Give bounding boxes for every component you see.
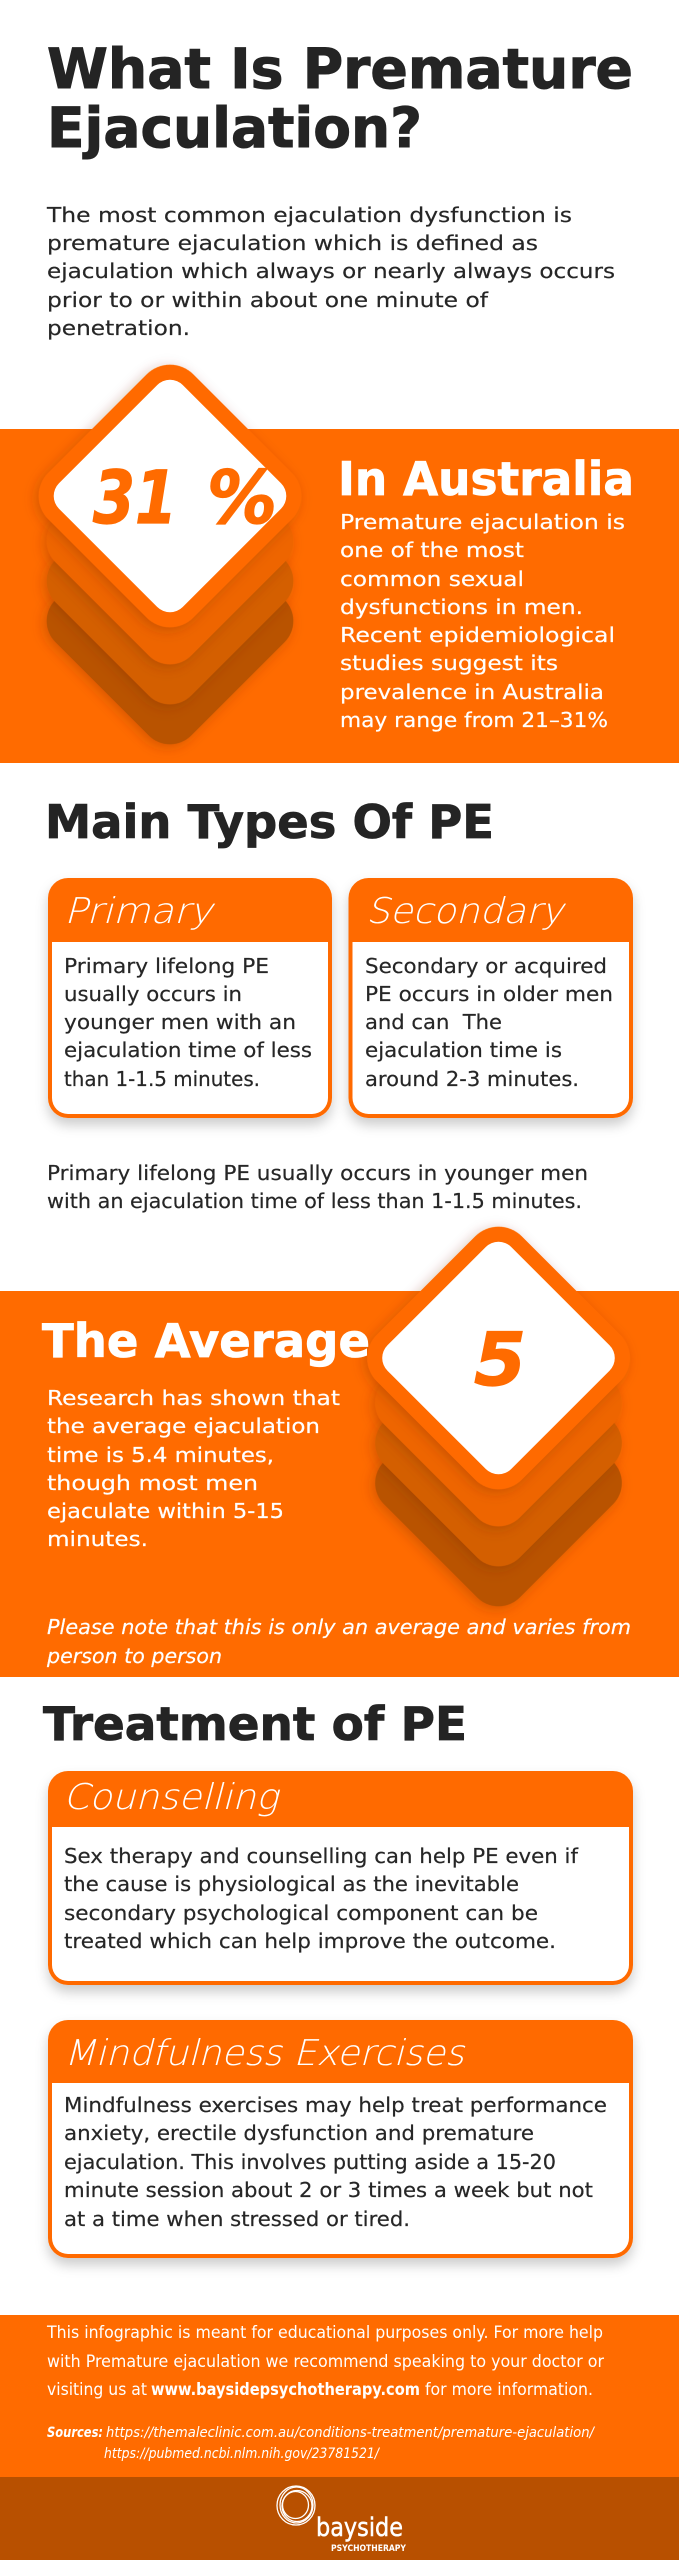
- card text: secondary: and can The: [365, 1010, 502, 1034]
- card text: secondary: Secondary or acquired: [365, 954, 607, 978]
- card text: secondary: [365, 954, 613, 1091]
- card title: mindfulness: Mindfulness Exercises: [64, 2033, 466, 2074]
- text: sources: https://pubmed.ncbi.nlm.nih.gov/23781521/: [104, 2446, 380, 2462]
- text: australia paragraph: prevalence in Australia: [340, 680, 604, 704]
- text: types summary: [47, 1161, 588, 1213]
- card text: secondary: ejaculation time is: [365, 1038, 562, 1062]
- intro paragraph: The most common ejaculation dysfunction is: [46, 203, 572, 227]
- card text: primary: younger men with an: [64, 1010, 296, 1034]
- band background: [0, 1291, 679, 1677]
- text: average note: person to person: [46, 1644, 222, 1668]
- text: types summary: with an ejaculation time of less than 1-1.5 minutes.: [47, 1189, 582, 1213]
- text: average paragraph: though most men: [47, 1471, 258, 1495]
- title: [47, 37, 633, 160]
- logo wordmark: bayside: [316, 2513, 403, 2543]
- card text: primary: usually occurs in: [64, 982, 242, 1006]
- card text: mindfulness: at a time when stressed or tired.: [64, 2207, 410, 2231]
- intro paragraph: [46, 203, 615, 340]
- panel: logo bar: [0, 2477, 679, 2560]
- panel: mindfulness card: [48, 2020, 633, 2258]
- card text: mindfulness: ejaculation. This involves putting aside a 15-20: [64, 2150, 556, 2174]
- text: australia paragraph: one of the most: [340, 538, 524, 562]
- panel: the average: [0, 1213, 679, 1677]
- text: average paragraph: minutes.: [47, 1527, 148, 1551]
- card text: primary: [64, 954, 312, 1091]
- text: australia paragraph: [340, 510, 625, 732]
- text: disclaimer: visiting us at: [47, 2380, 148, 2399]
- icon: stacked diamond with 31 %: [25, 351, 315, 757]
- card text: primary: Primary lifelong PE: [64, 954, 269, 978]
- card title: counselling: Counselling: [63, 1777, 281, 1818]
- title: Ejaculation?: [47, 96, 422, 160]
- intro paragraph: ejaculation which always or nearly always occurs: [47, 259, 615, 283]
- intro paragraph: prior to or within about one minute of: [47, 288, 489, 312]
- icon: stacked diamond with 5: [354, 1213, 643, 1619]
- heading: main types: Main Types Of PE: [45, 795, 494, 849]
- card text: counselling: secondary psychological component can be: [64, 1901, 538, 1925]
- text: sources: Sources:: [47, 2425, 103, 2441]
- panel: primary card: [48, 878, 332, 1118]
- card text: counselling: Sex therapy and counselling can help PE even if: [64, 1844, 579, 1868]
- card text: counselling: the cause is physiological as the inevitable: [64, 1872, 519, 1896]
- card text: secondary: around 2-3 minutes.: [365, 1067, 579, 1091]
- icon: stacked diamond with 31 %: 31: [93, 456, 177, 541]
- footer band: [0, 2315, 679, 2477]
- logo subtitle: PSYCHOTHERAPY: [331, 2544, 407, 2554]
- text: average paragraph: the average ejaculation: [47, 1414, 320, 1438]
- heading: in australia: In Australia: [338, 452, 634, 506]
- text: australia paragraph: dysfunctions in men.: [340, 595, 583, 619]
- icon: stacked diamond with 31 %: %: [207, 456, 277, 541]
- card text: mindfulness: Mindfulness exercises may help treat performance: [64, 2093, 607, 2117]
- text: australia paragraph: common sexual: [340, 567, 524, 591]
- panel: in australia: [0, 351, 679, 763]
- text: disclaimer: www.baysidepsychotherapy.com: [151, 2380, 420, 2399]
- panel: counselling card: [48, 1771, 633, 1985]
- heading: treatment: Treatment of PE: [43, 1697, 467, 1751]
- card text: counselling: [64, 1844, 579, 1953]
- text: average paragraph: ejaculate within 5-15: [47, 1499, 284, 1523]
- text: average note: [46, 1615, 631, 1668]
- band background: [0, 429, 679, 763]
- intro paragraph: penetration.: [47, 316, 190, 340]
- text: australia paragraph: may range from 21–31%: [340, 708, 608, 732]
- text: average note: Please note that this is only an average and varies from: [47, 1615, 631, 1639]
- icon: stacked diamond with 5: 5: [474, 1318, 526, 1403]
- text: sources: [47, 2425, 595, 2462]
- intro paragraph: premature ejaculation which is defined as: [47, 231, 538, 255]
- text: average paragraph: [47, 1386, 340, 1551]
- text: average paragraph: time is 5.4 minutes,: [47, 1443, 274, 1467]
- text: disclaimer: This infographic is meant for educational purposes only. For more help: [46, 2323, 603, 2342]
- card text: secondary: PE occurs in older men: [365, 982, 613, 1006]
- card text: mindfulness: anxiety, erectile dysfunction and premature: [64, 2121, 534, 2145]
- title: What Is Premature: [47, 37, 633, 101]
- card text: counselling: treated which can help improve the outcome.: [64, 1929, 556, 1953]
- panel: footer note: [0, 2315, 679, 2477]
- card text: primary: ejaculation time of less: [64, 1038, 312, 1062]
- text: disclaimer: with Premature ejaculation we recommend speaking to your doctor or: [47, 2352, 604, 2371]
- card title: secondary: Secondary: [366, 891, 566, 932]
- card text: mindfulness: minute session about 2 or 3 times a week but not: [64, 2178, 593, 2202]
- heading: the average: The Average: [42, 1314, 370, 1368]
- text: average paragraph: Research has shown that: [47, 1386, 340, 1410]
- panel: secondary card: [348, 878, 633, 1118]
- text: disclaimer: [46, 2323, 604, 2399]
- text: disclaimer: for more information.: [425, 2380, 593, 2399]
- text: types summary: Primary lifelong PE usually occurs in younger men: [47, 1161, 588, 1185]
- text: australia paragraph: Recent epidemiological: [340, 623, 615, 647]
- icon: bayside swirl logo: [277, 2486, 315, 2525]
- text: sources: https://themaleclinic.com.au/conditions-treatment/premature-ejaculation/: [106, 2425, 595, 2441]
- text: australia paragraph: studies suggest its: [340, 651, 558, 675]
- card text: mindfulness: [64, 2093, 607, 2231]
- card title: primary: Primary: [64, 891, 215, 932]
- card text: primary: than 1-1.5 minutes.: [64, 1067, 260, 1091]
- text: australia paragraph: Premature ejaculation is: [340, 510, 625, 534]
